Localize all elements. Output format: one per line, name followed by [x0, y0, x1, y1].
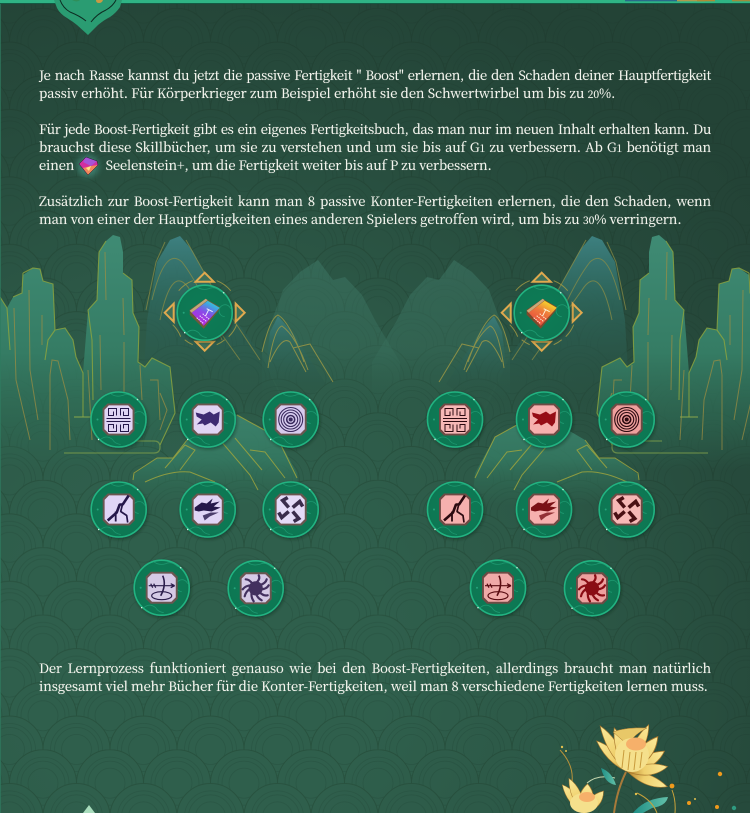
golden chrysanthemum flowers [559, 723, 736, 813]
paragraph: counter skills [39, 191, 711, 228]
left edge line [0, 4, 1, 813]
skill: bow [134, 560, 189, 615]
skill: dragon red [516, 482, 572, 537]
skill: spiked sun [228, 561, 283, 616]
skill: pinwheel red [599, 482, 654, 537]
skill: lightning red [428, 482, 482, 537]
bottom left gem ornament [83, 805, 95, 813]
skill: bow red [470, 560, 526, 615]
paragraph: skill books and soul stone [39, 119, 712, 174]
paragraph: boost skill introduction [38, 65, 712, 102]
skill: maze [91, 392, 146, 447]
left mountain range [0, 235, 400, 505]
skill: dragon [180, 482, 235, 537]
left boost skill book icon [165, 273, 245, 351]
left counter skill icons [91, 392, 318, 616]
skill: spiral [263, 392, 318, 447]
paragraph: counter skills: man von einer der Hauptfertigkeiten eines anderen Spielers getroffen wird, um bis zu 30% verringern. [39, 209, 682, 228]
skill: maze red [428, 392, 482, 447]
paragraph: boost skill introduction: Je nach Rasse kannst du jetzt die passive Fertigkeit " Boost" erlernen, die den Schaden deiner Hauptfertigkeit [39, 65, 711, 84]
skill: lightning [91, 482, 146, 537]
paragraph: skill books and soul stone: einen Seelenstein+, um die Fertigkeit weiter bis auf P zu verbessern. [39, 155, 492, 174]
paragraph: counter skills: Zusätzlich zur Boost-Fertigkeit kann man 8 passive Konter-Fertigkeiten erlernen, die den Schaden, wenn [39, 191, 711, 210]
skill: winged beast red [516, 392, 572, 447]
top shield ornament [54, 0, 122, 35]
skill: spiked sun red [564, 561, 620, 616]
skill: spiral red [599, 392, 654, 447]
paragraph: learning process: Der Lernprozess funktioniert genauso wie bei den Boost-Fertigkeiten, allerdings braucht man natürlich [39, 658, 711, 677]
paragraph: skill books and soul stone: brauchst diese Skillbücher, um sie zu verstehen und um sie bis auf G1 zu verbessern. Ab G1 benötigt man [39, 137, 711, 156]
right mountain range [372, 235, 750, 505]
paragraph: boost skill introduction: passiv erhöht. Für Körperkrieger zum Beispiel erhöht sie den Schwertwirbel um bis zu 20%. [39, 83, 615, 102]
paragraph: learning process [39, 658, 711, 695]
soul stone gem icon [77, 155, 99, 177]
skill: winged beast [180, 392, 235, 447]
skill: pinwheel [263, 482, 318, 537]
right counter skill icons [428, 392, 654, 616]
top border bar [0, 0, 750, 4]
right boost skill book icon [502, 273, 582, 351]
paragraph: skill books and soul stone: Für jede Boost-Fertigkeit gibt es ein eigenes Fertigkeitsbuch, das man nur im neuen Inhalt erhalten kann. Du [39, 119, 711, 138]
paragraph: learning process: insgesamt viel mehr Bücher für die Konter-Fertigkeiten, weil man 8 verschiedene Fertigkeiten lernen muss. [39, 676, 708, 695]
